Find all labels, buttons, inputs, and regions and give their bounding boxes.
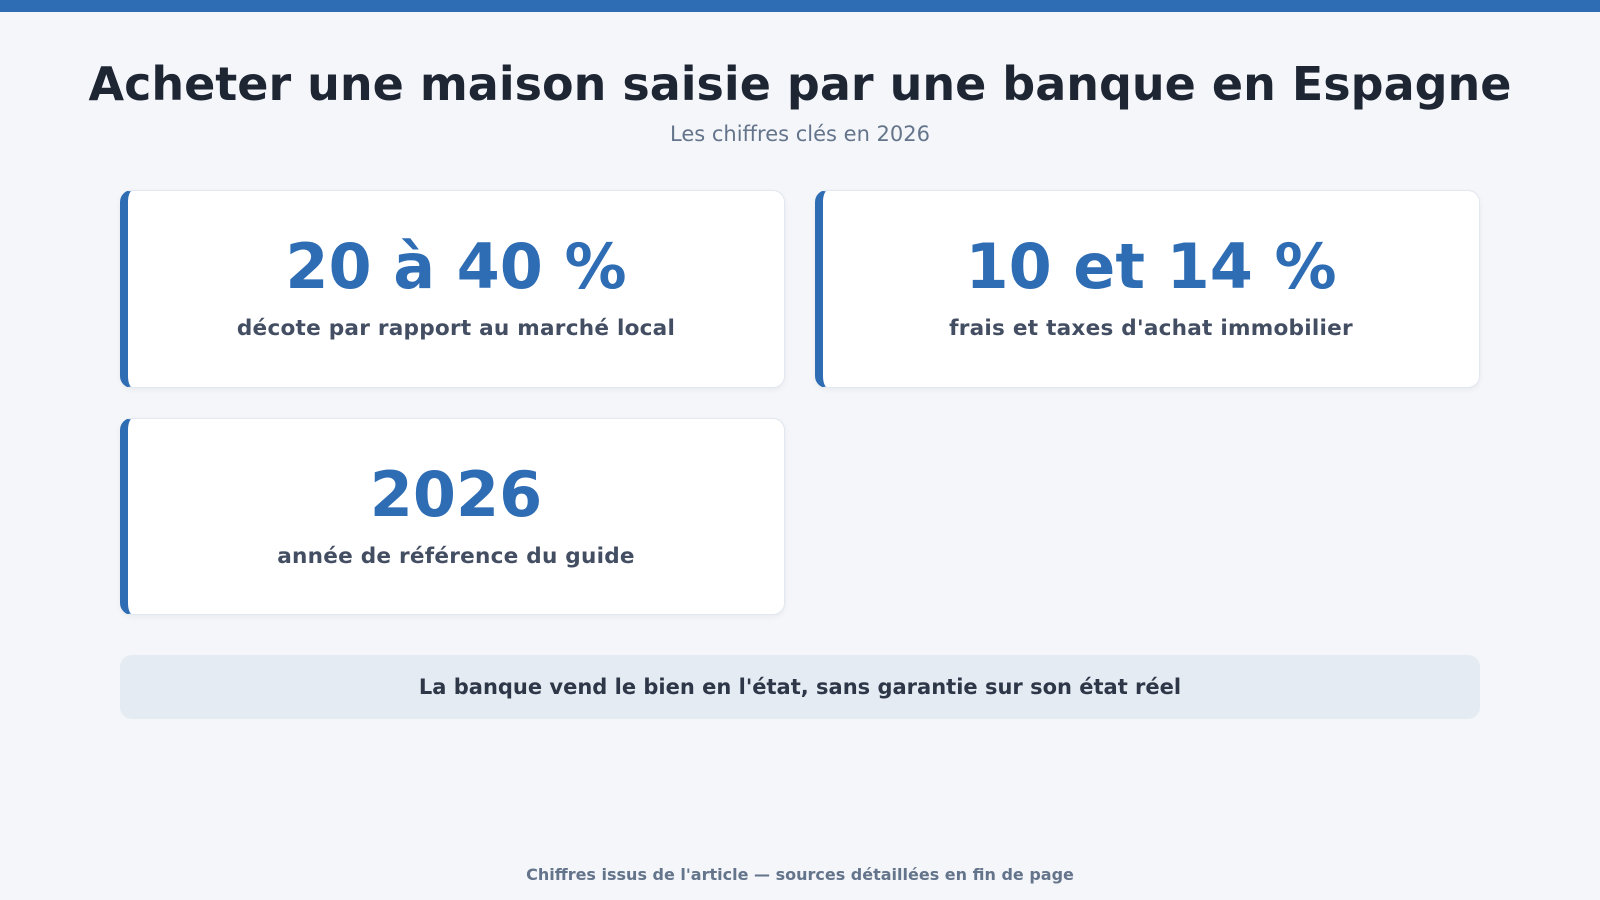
stat: year: 2026 [370, 458, 542, 531]
title: Acheter une maison saisie par une banque en Espagne [88, 57, 1512, 111]
panel: discount card [120, 190, 785, 388]
subtitle: Les chiffres clés en 2026 [670, 122, 930, 146]
callout banner [120, 655, 1480, 719]
panel: fees card [815, 190, 1480, 388]
stat: fees: 10 et 14 % [965, 230, 1337, 303]
stat: discount: 20 à 40 % [285, 230, 627, 303]
callout banner: La banque vend le bien en l'état, sans garantie sur son état réel [419, 675, 1181, 699]
panel: year card [120, 418, 785, 615]
top accent bar [0, 0, 1600, 12]
label: year: année de référence du guide [277, 544, 635, 569]
footer note: Chiffres issus de l'article — sources détaillées en fin de page [526, 865, 1074, 884]
label: discount: décote par rapport au marché local [237, 316, 675, 341]
label: fees: frais et taxes d'achat immobilier [949, 316, 1353, 341]
